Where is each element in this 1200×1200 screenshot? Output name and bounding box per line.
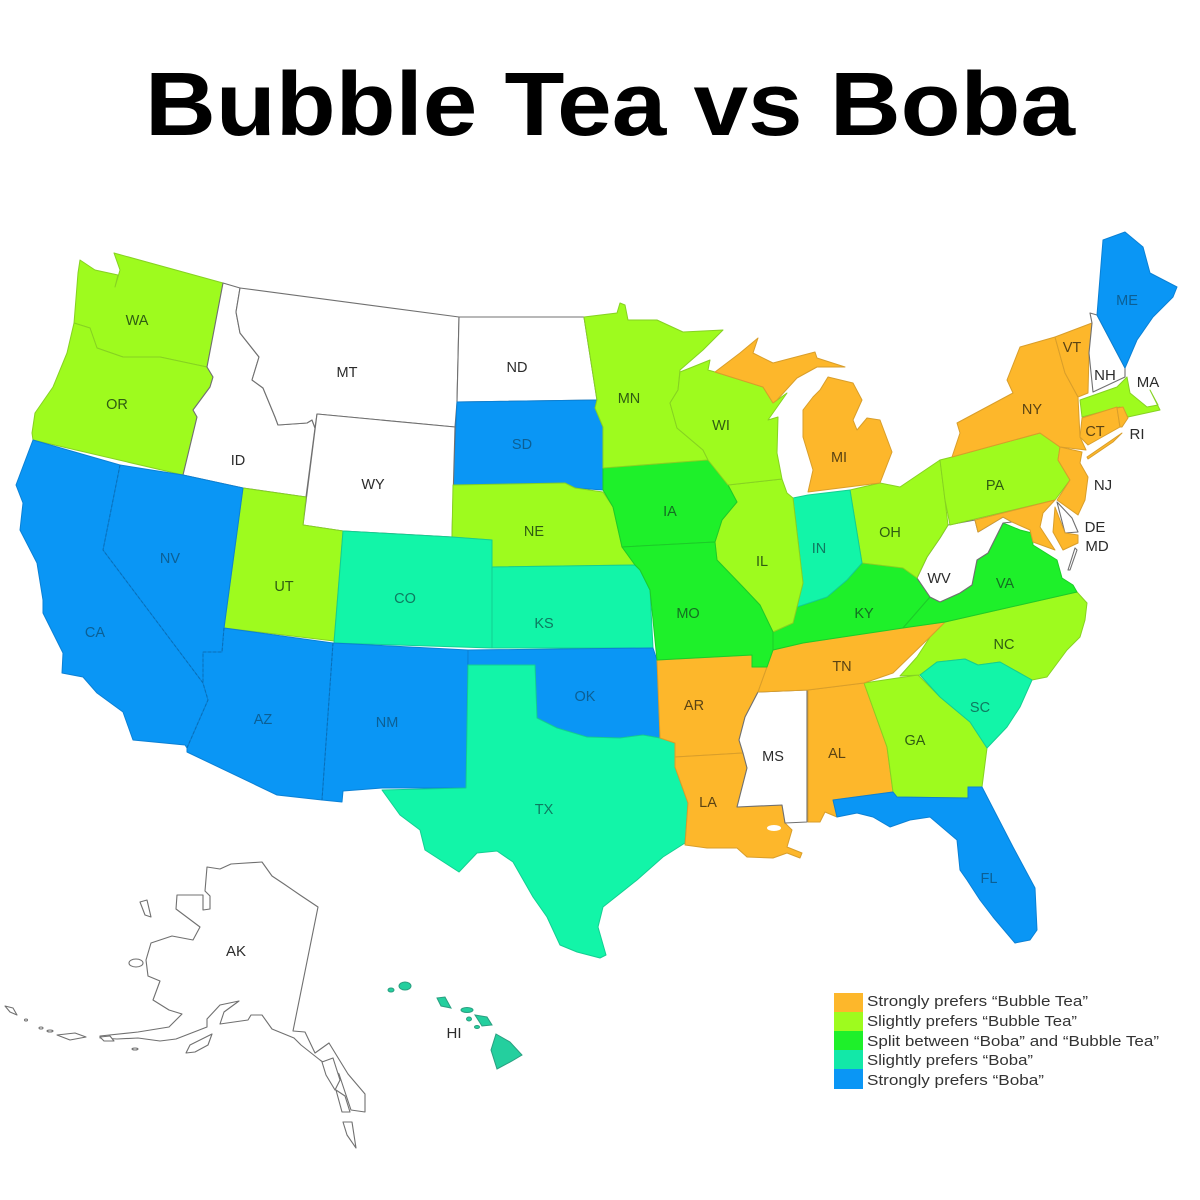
state: New Mexico: NM: [376, 715, 398, 731]
state: West Virginia: WV: [927, 571, 951, 587]
state: Missouri: [622, 542, 773, 667]
legend item: strongly prefers Bubble Tea: [834, 993, 1088, 1012]
state: Indiana: IN: [812, 541, 826, 557]
legend: [834, 993, 1159, 1089]
state: Idaho: ID: [231, 453, 245, 469]
state: South Dakota: SD: [512, 437, 532, 453]
state: Connecticut: CT: [1085, 424, 1105, 440]
state: Alabama: [808, 683, 893, 822]
state: Nevada: [103, 465, 243, 683]
state: Vermont: VT: [1063, 340, 1081, 356]
state: Hawaii: [388, 982, 522, 1069]
state: California: CA: [85, 625, 105, 641]
state: Oklahoma: OK: [575, 689, 596, 705]
state: Nebraska: [452, 483, 635, 567]
state: Montana: MT: [337, 365, 358, 381]
state: Louisiana: [675, 753, 802, 858]
state: Arizona: [187, 628, 333, 800]
state: Rhode Island: [1117, 407, 1144, 443]
state: Alaska: [5, 862, 365, 1148]
state: Wyoming: WY: [361, 477, 385, 493]
title: Bubble Tea vs Boba: [145, 55, 1076, 155]
state: North Dakota: ND: [507, 360, 527, 376]
state: Kansas: [492, 565, 653, 648]
state: Missouri: MO: [676, 606, 700, 622]
state: New York: [952, 337, 1122, 459]
state: South Carolina: [920, 659, 1032, 748]
state: Illinois: IL: [756, 554, 768, 570]
state: Arizona: AZ: [254, 712, 272, 728]
state: Ohio: [850, 460, 948, 578]
state: South Dakota: [453, 400, 603, 490]
state: Virginia: VA: [996, 576, 1014, 592]
legend item: slightly prefers Bubble Tea: Slightly prefers “Bubble Tea”: [867, 1013, 1077, 1030]
state: Massachusetts: [1080, 374, 1160, 417]
state: Alabama: AL: [828, 746, 846, 762]
state: Pennsylvania: PA: [986, 478, 1004, 494]
state: Florida: FL: [981, 871, 997, 887]
state: New Jersey: NJ: [1094, 477, 1112, 494]
state: Hawaii: HI: [446, 1025, 462, 1042]
state: North Dakota: [457, 317, 597, 402]
state: South Carolina: SC: [970, 700, 990, 716]
state: New Hampshire: NH: [1094, 367, 1116, 384]
state: Rhode Island: RI: [1130, 426, 1144, 443]
state: New Hampshire: [1089, 313, 1125, 392]
state: Colorado: [334, 531, 492, 648]
legend item: strongly prefers Bubble Tea: Strongly prefers “Bubble Tea”: [867, 993, 1088, 1010]
map: contiguous United States: [16, 232, 1177, 958]
state: Maine: [1097, 232, 1177, 368]
state: Minnesota: MN: [618, 391, 640, 407]
state: Virginia: [903, 523, 1077, 628]
legend item: slightly prefers Boba: Slightly prefers “Boba”: [867, 1052, 1033, 1069]
state: Mississippi: [737, 690, 807, 823]
state: Florida: [833, 787, 1037, 943]
state: Oregon: OR: [106, 397, 128, 413]
state: Utah: UT: [274, 579, 294, 595]
state: Pennsylvania: [940, 433, 1070, 525]
state: Minnesota: [584, 303, 723, 468]
state: Tennessee: [758, 622, 945, 692]
state: Maryland: MD: [1085, 538, 1109, 555]
state: New York: NY: [1022, 402, 1042, 418]
state: North Carolina: NC: [994, 637, 1014, 653]
state: Indiana: [793, 490, 862, 607]
state: Maryland: [975, 500, 1109, 555]
state: Wisconsin: WI: [712, 418, 730, 434]
state: West Virginia: [917, 517, 1012, 602]
state: Massachusetts: MA: [1137, 374, 1159, 391]
state: North Carolina: [900, 592, 1087, 680]
state: Montana: [236, 288, 459, 428]
state: Kentucky: [773, 563, 930, 650]
state: Oregon: [32, 323, 213, 475]
state: Idaho: [183, 283, 315, 497]
state: Nebraska: NE: [524, 524, 544, 540]
legend item: slightly prefers Bubble Tea: [834, 1012, 1077, 1031]
state: Texas: [382, 665, 688, 958]
state: Wisconsin: [670, 360, 787, 485]
state: Maine: ME: [1116, 293, 1138, 309]
state: Oklahoma: [468, 648, 660, 738]
legend item: split between Boba and Bubble Tea: Split between “Boba” and “Bubble Tea”: [867, 1033, 1159, 1050]
state: Alaska: AK: [226, 943, 246, 960]
state: Mississippi: MS: [762, 749, 784, 765]
state: Texas: TX: [535, 802, 554, 818]
state: Nevada: NV: [160, 551, 180, 567]
state: Georgia: GA: [905, 733, 926, 749]
state borders: dashed western lines: [103, 465, 333, 800]
state: Utah: [224, 488, 343, 641]
legend item: slightly prefers Boba: [834, 1050, 1033, 1069]
state: Colorado: CO: [394, 591, 416, 607]
state: Wyoming: [303, 414, 455, 537]
state: Virginia eastern shore: [1068, 548, 1077, 570]
state: Iowa: IA: [663, 504, 677, 520]
state: New Mexico: [322, 643, 468, 802]
state: California: [16, 440, 208, 748]
state: Kentucky: KY: [854, 606, 874, 622]
state: Louisiana: LA: [699, 795, 717, 811]
state: Iowa: [603, 460, 737, 547]
legend item: strongly prefers Boba: Strongly prefers “Boba”: [867, 1072, 1044, 1089]
legend item: strongly prefers Boba: [834, 1069, 1044, 1089]
state: Michigan: [715, 338, 892, 492]
state: Georgia: [864, 675, 987, 798]
state: Washington: WA: [126, 313, 149, 329]
state: Ohio: OH: [879, 525, 901, 541]
state: Washington: [74, 253, 223, 367]
state: New Jersey: [1057, 447, 1112, 515]
state: Kansas: KS: [534, 616, 554, 632]
state: Vermont: [1055, 323, 1092, 397]
state: Delaware: [1057, 502, 1105, 536]
state: Connecticut: [1080, 407, 1120, 445]
state: Illinois: [715, 479, 803, 632]
state: Arkansas: AR: [684, 698, 704, 714]
state: Michigan: MI: [831, 450, 847, 466]
state: Delaware: DE: [1085, 519, 1105, 536]
state: Tennessee: TN: [832, 659, 852, 675]
state: Arkansas: [657, 655, 767, 757]
